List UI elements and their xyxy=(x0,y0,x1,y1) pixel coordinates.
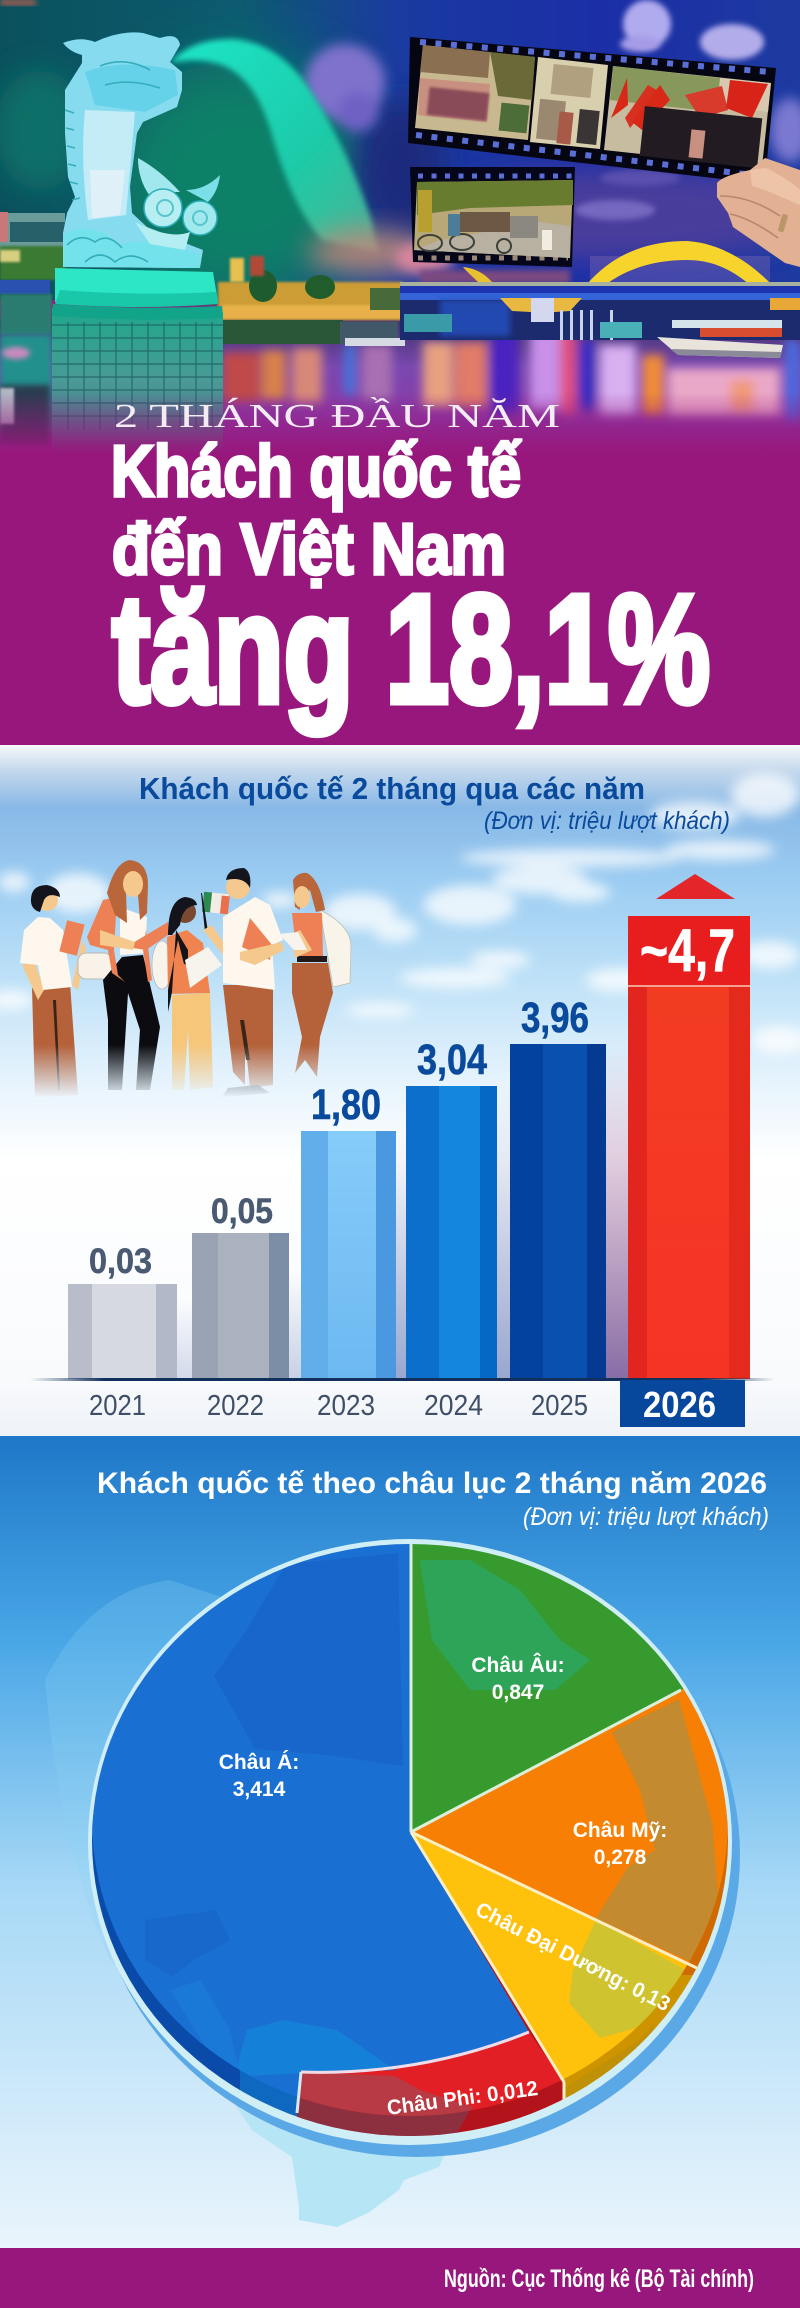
figure 1 xyxy=(20,885,86,1097)
year axis labels: 2022 xyxy=(207,1390,264,1422)
bar: 2021 xyxy=(68,1242,177,1379)
value: 0,03 xyxy=(89,1242,152,1281)
panel: bar chart by year xyxy=(0,745,800,1438)
heading: kicker: 2 THÁNG ĐẦU NĂM xyxy=(114,397,560,435)
slice dividers xyxy=(297,1544,701,2113)
value: 3,04 xyxy=(417,1036,487,1084)
year axis labels: 2025 xyxy=(531,1390,588,1422)
slice walls xyxy=(40,1815,764,2160)
icon: second film strip with cyclo photo xyxy=(410,167,575,267)
bar: 2022 xyxy=(192,1192,289,1379)
panel: pie chart by continent xyxy=(0,1436,800,2248)
figure 2 xyxy=(78,860,168,1090)
label: Europe xyxy=(471,1653,565,1704)
pie slices xyxy=(40,1500,780,2160)
label: Asia: Châu Á: xyxy=(219,1751,299,1774)
value: ~4,7 xyxy=(640,917,735,984)
label: Africa: Châu Phi: 0,012 xyxy=(386,2077,539,2120)
icon: film strip with three tourist photos xyxy=(408,37,776,182)
title block xyxy=(111,397,710,735)
slice: Asia xyxy=(40,1500,529,2140)
label: Oceania: Châu Đại Dương: 0,13 xyxy=(472,1898,674,2016)
year axis labels: 2024 xyxy=(424,1390,483,1422)
bar shadows xyxy=(177,1044,628,1379)
icon: hand holding film xyxy=(717,158,800,267)
year axis labels: 2021 xyxy=(89,1390,146,1422)
slice: Africa xyxy=(297,2032,564,2140)
arrow: rising triangle xyxy=(656,874,735,899)
label: Europe: 0,847 xyxy=(492,1681,544,1704)
icon: carp dragon statue xyxy=(63,32,220,268)
slice: Oceania xyxy=(411,1832,780,2140)
year axis labels: 2023 xyxy=(317,1390,375,1422)
figure 4 xyxy=(203,868,284,1097)
label: Asia xyxy=(219,1751,299,1801)
value: 1,80 xyxy=(311,1081,381,1129)
pie rim xyxy=(88,1539,732,2145)
label: Americas xyxy=(573,1819,667,1869)
bar: 2023 xyxy=(301,1081,396,1379)
year axis labels: 2026 xyxy=(643,1384,716,1425)
illustration: group of students xyxy=(20,860,351,1097)
icon: tourist boats xyxy=(404,314,783,358)
figure 3 xyxy=(152,892,230,1090)
chart unit note: (Đơn vị: triệu lượt khách) xyxy=(484,807,730,835)
year axis labels xyxy=(89,1380,745,1427)
map overlay on slices xyxy=(145,1553,719,2140)
axis line xyxy=(30,1378,775,1381)
left bank xyxy=(0,212,65,445)
panel: hero photo and title xyxy=(0,0,800,745)
label: Americas: 0,278 xyxy=(594,1846,647,1869)
label: Americas: Châu Mỹ: xyxy=(573,1819,667,1842)
chart heading: Khách quốc tế 2 tháng qua các năm xyxy=(139,771,645,806)
icon: dragon bridge xyxy=(400,241,800,340)
icon: fountain jet xyxy=(170,39,378,252)
slice: Europe xyxy=(411,1500,780,1832)
clouds background xyxy=(0,773,800,1054)
heading: line one: Khách quốc tế xyxy=(111,432,522,512)
value: 0,05 xyxy=(211,1192,273,1231)
icon: fountain mist xyxy=(308,230,455,274)
footer: source xyxy=(0,2248,800,2308)
chart heading: Khách quốc tế theo châu lục 2 tháng năm 2026 xyxy=(97,1467,767,1500)
heading: line two: đến Việt Nam xyxy=(112,510,506,590)
figure 5 xyxy=(279,873,351,1077)
chart unit note: (Đơn vị: triệu lượt khách) xyxy=(523,1503,769,1531)
city lights on the bank xyxy=(218,256,405,346)
dark map on wall xyxy=(564,2023,655,2115)
purple fade xyxy=(0,392,800,455)
label: Europe: Châu Âu: xyxy=(471,1653,565,1677)
water reflections xyxy=(223,340,800,423)
pie depth shadow xyxy=(94,1553,740,2157)
icon: statue pedestal xyxy=(52,268,223,446)
bar: 2025 xyxy=(510,994,606,1379)
water surface xyxy=(0,318,800,440)
label: Asia: 3,414 xyxy=(233,1778,286,1801)
slice: Americas xyxy=(411,1640,780,2015)
background world map xyxy=(45,1580,453,2227)
bar: 2024 xyxy=(406,1036,497,1379)
photo one xyxy=(415,45,535,140)
bar: 2026 xyxy=(628,916,750,1379)
photo three xyxy=(604,66,771,168)
photo two xyxy=(530,57,608,149)
icon: clouds in night sky xyxy=(305,0,800,220)
value: 3,96 xyxy=(521,994,589,1042)
